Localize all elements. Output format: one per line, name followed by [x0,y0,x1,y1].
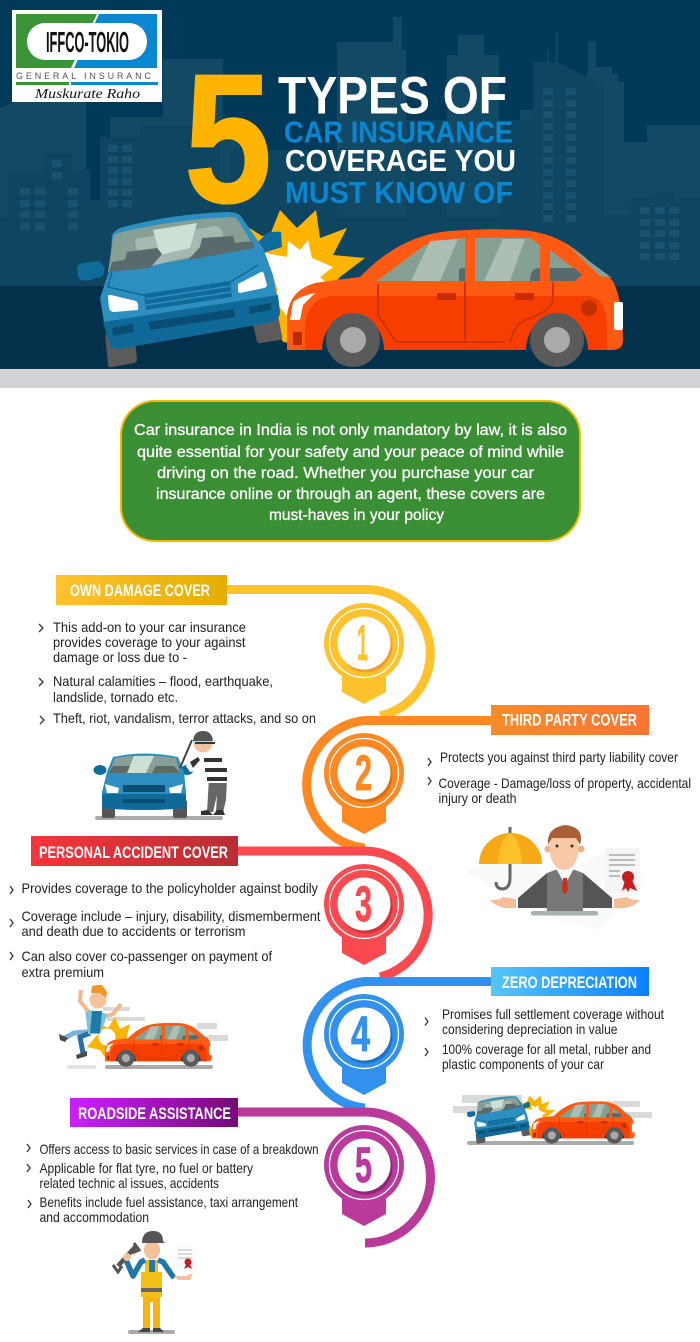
text [10,880,321,980]
numeral 5: 5 [184,35,272,241]
title: MUST KNOW OF [285,175,513,210]
text: Offers access to basic services in case of a breakdown [40,1141,318,1157]
text: Coverage include – injury, disability, dismemberment [22,908,321,924]
logo: Muskurate Raho [34,87,140,102]
text: injury or death [438,790,516,806]
label [56,575,227,605]
grey band [0,369,700,388]
text: damage or loss due to - [53,649,187,665]
text: Theft, riot, vandalism, terror attacks, and so on [53,710,316,726]
badge 4: 4 [351,1006,370,1062]
label: THIRD PARTY COVER [502,710,637,730]
label [491,967,649,996]
serpentine connector [227,589,491,1243]
intro box: quite essential for your safety and your peace of mind while [137,444,564,461]
illustration: car and thief [94,731,227,820]
intro box [121,401,580,541]
label [491,705,649,735]
title: TYPES OF [278,66,507,126]
text: extra premium [22,964,104,980]
city skyline [0,17,700,286]
title [184,35,516,241]
text: considering depreciation in value [442,1021,618,1037]
label: PERSONAL ACCIDENT COVER [39,843,228,862]
text: Provides coverage to the policyholder against bodily [22,880,318,896]
badge 1: 1 [357,615,368,671]
title: CAR INSURANCE [284,114,513,150]
text: 100% coverage for all metal, rubber and [442,1041,651,1057]
badge 2: 2 [355,745,372,801]
text: and accommodation [40,1209,149,1225]
text: plastic components of your car [442,1056,604,1072]
text: Natural calamities – flood, earthquake, [53,673,273,689]
header background [0,0,700,369]
illustration: pedestrian hit by car [59,985,228,1069]
label: ZERO DEPRECIATION [502,973,637,992]
intro box: must-haves in your policy [269,507,444,524]
text: provides coverage to your against [53,634,246,650]
logo: IFFCO-TOKIO [46,27,129,59]
badge 5 [324,1125,404,1226]
orange car [287,229,623,367]
text [39,619,316,726]
section 1: own damage [39,575,404,820]
text: and death due to accidents or terrorism [22,923,246,939]
crash illustration [77,210,623,367]
title: COVERAGE YOU [285,143,516,178]
intro box: driving on the road. Whether you purchase your car [157,465,534,482]
badge 3: 3 [355,876,372,932]
section 4: zero depreciation [324,967,664,1145]
section 5: roadside assistance [27,1098,404,1334]
section 3: personal accident [10,836,404,1069]
badge 4 [324,994,404,1095]
badge 5: 5 [355,1137,372,1193]
intro box: Car insurance in India is not only mandatory by law, it is also [134,422,567,439]
text: Applicable for flat tyre, no fuel or battery [40,1160,253,1176]
text: landslide, tornado etc. [53,689,178,705]
badge 2 [324,733,404,834]
badge 1 [324,603,404,704]
logo: GENERAL INSURANC [16,71,152,81]
text: Benefits include fuel assistance, taxi arrangement [40,1194,298,1210]
text [425,1006,664,1072]
text: This add-on to your car insurance [53,619,246,635]
badge 3 [324,864,404,965]
label: ROADSIDE ASSISTANCE [78,1104,231,1123]
text [428,749,691,806]
section 2: third party [324,705,691,930]
intro box: insurance online or through an agent, these covers are [156,486,545,503]
illustration: crash [453,1095,652,1145]
explosion [248,210,365,343]
label [31,836,238,866]
illustration: mechanic [113,1231,197,1334]
text: related technic al issues, accidents [40,1175,219,1191]
text: Promises full settlement coverage without [442,1006,664,1022]
blue car [77,212,282,367]
label: OWN DAMAGE COVER [70,581,210,600]
illustration: businessman with umbrella and certificate [465,825,645,930]
text: Can also cover co-passenger on payment of [22,948,272,964]
label [70,1098,238,1127]
logo [12,10,162,102]
text [27,1141,318,1225]
